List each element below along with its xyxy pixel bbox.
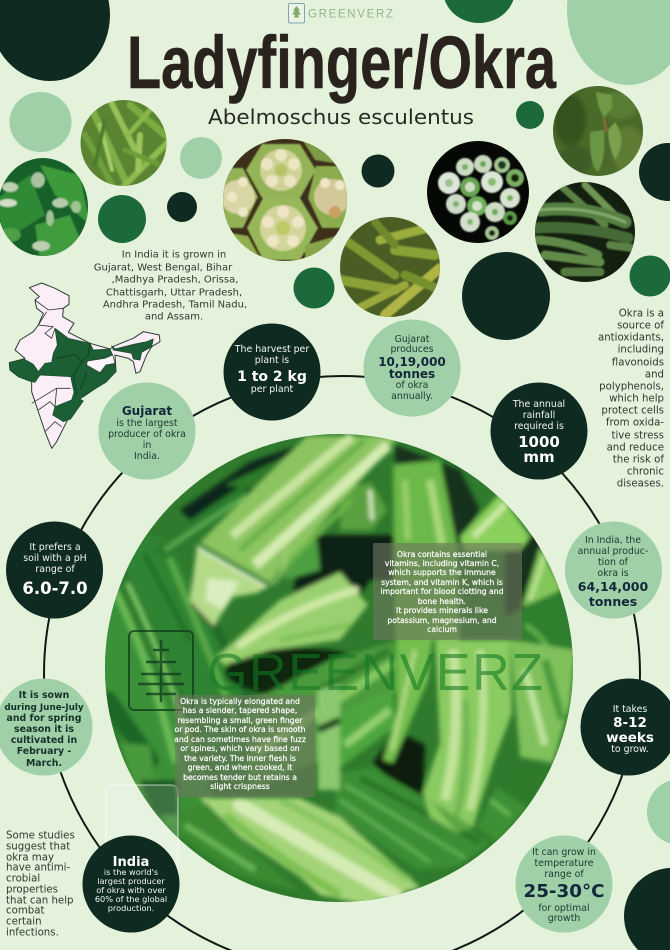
text: antioxidants: which help [609,394,664,404]
node: Gujarat largest producer: is the largest [116,418,178,429]
map: producing states [9,328,153,422]
pods: lower mid light [217,572,368,665]
node: India annual production: tonnes [589,594,637,609]
text: antimicrobial [6,830,75,938]
node: sowing season: during June-July [4,703,84,713]
node: Gujarat production: produces [390,344,434,355]
text: antioxidants [598,308,664,490]
node: temperature range: for optimal [538,903,590,914]
pods: striped dark green [335,767,490,870]
node: temperature range: 25-30°C [524,881,604,902]
node: harvest per plant: per plant [251,384,294,395]
node: India annual production: tion of [598,557,629,568]
node: annual rainfall: mm [523,448,555,466]
node: sowing season: cultivated in [11,735,77,746]
text: growing states: Andhra Pradesh, Tamil Nadu, [103,300,247,310]
node: temperature range: It can grow in [532,847,596,858]
node: Gujarat largest producer: in [143,440,151,451]
photo: okra plant [553,86,643,176]
node: India world's largest: India [113,855,149,870]
text: antioxidants: from oxida- [606,418,664,428]
node: annual rainfall: rainfall [523,410,555,421]
map of India [9,283,160,448]
overlay text: nutrients: Okra contains essential [397,550,487,559]
text: antimicrobial: properties [6,884,58,896]
node: sowing season: It is sown [19,690,69,701]
node: Gujarat production [364,320,460,416]
text: antioxidants: including [618,344,664,356]
text: growing states: In India it is grown in [122,250,226,260]
overlay text: nutrients [373,543,522,640]
node: India annual production: In India, the [585,535,641,546]
text: antimicrobial: combat [6,906,44,916]
overlay text: appearance: slight crispness [210,782,270,791]
text: growing states [94,250,247,322]
dark gaps [178,445,294,522]
node: growing time: to grow. [611,744,649,755]
logo: Greenverz [288,4,393,23]
pods: left stripes [95,555,260,790]
node: growing time: It takes [613,704,647,715]
node: temperature range: growth [548,913,580,924]
node: harvest per plant: The harvest per [234,344,309,355]
pods: centre lower left [245,640,410,790]
photo: sliced okra close-up [0,158,88,256]
pods: calyx [190,547,267,627]
text: growing states: and Assam. [145,312,203,322]
text: antioxidants: Okra is a [619,308,664,320]
node: Gujarat production: Gujarat [395,334,430,345]
node: temperature range [516,836,612,932]
overlay text: appearance: green, and when cooked, it [188,763,292,772]
node: soil pH [6,522,103,618]
node: Gujarat largest producer [98,382,196,480]
text: antimicrobial: that can help [6,896,74,906]
overlay text: nutrients: It provides minerals like [396,606,488,615]
node: Gujarat production: of okra [396,380,428,391]
node: Gujarat largest producer: producer of okra [108,429,186,440]
node: India world's largest: 60% of the global [95,894,167,904]
pods: big centre [423,640,512,833]
node: harvest per plant: 1 to 2 kg [237,369,307,385]
overlay text: appearance: has a slender, tapered shape, [183,706,297,715]
text: antimicrobial: crobial [6,874,40,884]
pods: main big pod [200,436,400,583]
logo: Greenverz: GREENVERZ [308,8,393,20]
ring connecting fact nodes [44,376,640,950]
text: growing states: Chattisgarh, Uttar Pradesh, [106,288,242,298]
pods: lower left mid [166,808,294,889]
text: antimicrobial: have antimi- [6,862,71,874]
overlay text: nutrients: bone health. [418,597,466,606]
node: sowing season: March. [26,758,62,769]
node: India world's largest [82,836,180,932]
overlay text: nutrients: vitamins, including vitamin C, [385,559,499,568]
text: antioxidants: source of [617,320,664,332]
node: annual rainfall: required is [514,421,564,432]
node: Gujarat largest producer: India. [134,451,160,462]
text: antimicrobial: certain [6,916,42,928]
node: sowing season: February - [17,746,71,757]
node: India world's largest: production. [108,903,154,913]
text: antioxidants: antioxidants, [598,332,664,344]
node: Gujarat production: annually. [391,391,433,402]
node: India annual production: 64,14,000 [578,579,648,594]
text: antimicrobial: suggest that [6,842,70,852]
node: sowing season [0,678,92,776]
pods: left of centre band [340,687,395,768]
photo: okra pods stacked [533,180,637,284]
text: growing states: ,Madhya Pradesh, Orissa, [112,274,238,286]
node: India annual production: annual produc- [578,546,648,557]
overlay text: appearance: and can sometimes have fine fuzz [174,735,306,744]
text: antioxidants: and [645,370,664,380]
node: annual rainfall [490,382,588,480]
text: antioxidants: diseases. [617,478,664,490]
node: Gujarat production: tonnes [389,367,435,381]
node: soil pH: 6.0-7.0 [22,579,88,598]
text: antioxidants: the risk of [613,454,664,466]
text: antioxidants: chronic [627,466,664,478]
node: India world's largest: largest producer [97,876,165,886]
text: antioxidants: protect cells [601,406,664,416]
overlay text: appearance: resembling a small, green finger [178,716,303,725]
node: annual rainfall: The annual [512,399,565,410]
pods: dark behind main pod [160,485,250,556]
node: Gujarat largest producer: Gujarat [122,404,172,418]
map: non-producing states [9,283,160,448]
watermark: Greenverz logo [129,631,193,710]
main photo: okra close-up [95,430,580,910]
text: antioxidants: polyphenols, [599,382,664,392]
node: soil pH: soil with a pH [23,553,87,564]
pods: right striped [510,640,575,763]
photo: okra pods yellow-green [338,215,442,319]
overlay text: appearance: the variety. The inner flesh is [184,754,296,763]
text: antimicrobial: okra may [6,852,54,864]
pods: thin middle [383,640,432,763]
node: harvest per plant [224,324,320,420]
photo: okra slices on black [425,139,531,245]
node: soil pH: range of [35,564,75,575]
overlay text: nutrients: important for blood clotting and [380,587,504,596]
node: temperature range: temperature [535,858,594,869]
pods: right light [460,493,530,552]
text: antioxidants: and reduce [607,442,664,454]
node: growing time [580,678,670,776]
node: sowing season: season it is [14,724,74,735]
node: annual rainfall: 1000 [518,433,560,451]
overlay text: nutrients: calcium [427,625,457,634]
text: antioxidants: tive stress [611,430,664,442]
text: antioxidants: flavonoids [612,358,664,368]
overlay text: nutrients: potassium, magnesium, and [387,616,497,625]
overlay text: appearance [174,695,315,797]
pods: large pale [200,798,420,905]
node: growing time: 8-12 [613,715,647,731]
subtitle: Abelmoschus esculentus [208,105,474,129]
node: growing time: weeks [606,730,654,746]
overlay text: appearance: becomes tender but retains a [183,773,297,782]
photo: okra pods heap [80,100,166,186]
text: growing states: Gujarat, West Bengal, Bihar [94,262,233,274]
faint watermark shape [106,785,178,900]
node: India world's largest: is the world's [104,867,158,877]
node: temperature range: range of [544,869,584,880]
node: harvest per plant: plant is [255,355,289,366]
overlay text: appearance: or pod. The skin of okra is smooth [174,725,306,734]
node: India world's largest: of okra with over [96,885,166,895]
text: antimicrobial: infections. [6,928,59,938]
node: India annual production [565,522,662,618]
overlay text: nutrients: system, and vitamin K, which is [381,578,503,587]
overlay text: appearance: or spines, which vary based on [180,744,300,753]
node: sowing season: and for spring [7,713,81,724]
text: antimicrobial: Some studies [6,830,75,842]
overlay text: nutrients: which supports the immune [388,568,496,577]
overlay text: appearance: Okra is typically elongated and [180,697,300,706]
node: Gujarat production: 10,19,000 [378,355,446,369]
pods: calyx pod upper right [340,483,387,530]
node: India annual production: okra is [597,568,629,579]
photo: okra cross-sections [220,136,350,264]
watermark: Greenverz text: GREENVERZ [207,644,543,702]
node: soil pH: It prefers a [29,542,81,553]
pods: vertical top [393,460,460,640]
